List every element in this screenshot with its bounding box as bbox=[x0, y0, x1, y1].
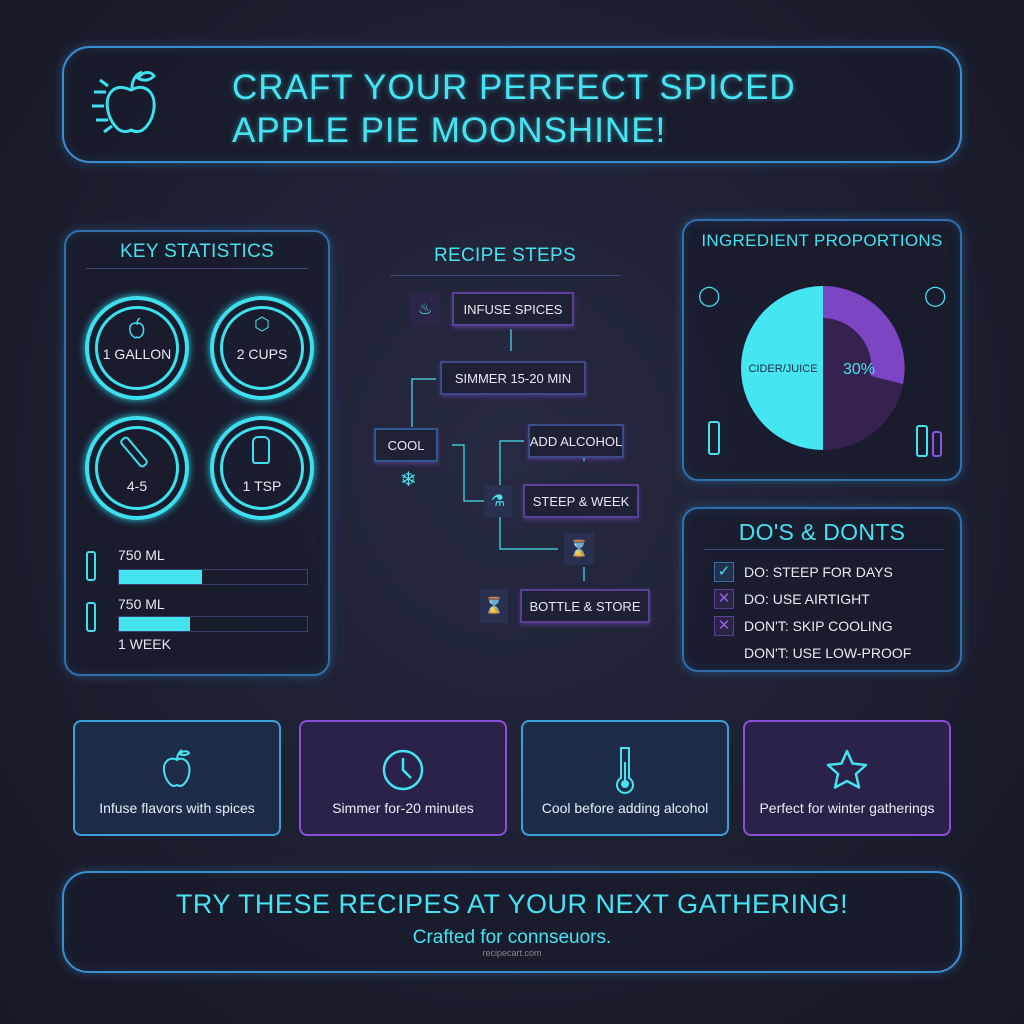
step: simmer bbox=[440, 361, 586, 395]
footer banner: recipecart.com bbox=[482, 948, 542, 958]
step: add alcohol bbox=[528, 424, 624, 458]
panel: do's and donts bbox=[682, 507, 962, 672]
stat: 2 cups: 2 CUPS bbox=[237, 346, 287, 362]
step: infuse spices: INFUSE SPICES bbox=[464, 302, 562, 316]
panel: recipe steps bbox=[372, 245, 652, 628]
card: winter bbox=[743, 720, 951, 836]
card: infuse: Infuse flavors with spices bbox=[99, 800, 255, 816]
icon: hourglass bbox=[564, 533, 594, 565]
bar: 750 ml week: 750 ML bbox=[118, 596, 165, 612]
card: cool: Cool before adding alcohol bbox=[542, 800, 708, 816]
pie chart bbox=[741, 286, 905, 450]
heading: key statistics: KEY STATISTICS bbox=[120, 241, 274, 262]
bar: 750 ml week: 1 WEEK bbox=[118, 636, 171, 652]
stat: 2 cups: ⬡ bbox=[254, 314, 270, 334]
card: cool bbox=[521, 720, 729, 836]
title text: APPLE PIE MOONSHINE! bbox=[232, 111, 666, 150]
stat: 1 tsp: 1 TSP bbox=[243, 478, 281, 494]
list: DO: STEEP FOR DAYS bbox=[744, 564, 893, 580]
heading: DO'S & DONTS bbox=[739, 519, 905, 545]
footer banner: Crafted for connseuors. bbox=[413, 927, 611, 948]
icons: ◯ bbox=[698, 285, 720, 307]
step: add alcohol: ADD ALCOHOL bbox=[530, 434, 622, 448]
card: winter: Perfect for winter gatherings bbox=[759, 800, 935, 816]
title banner bbox=[62, 46, 962, 163]
bar: 750 ml: 750 ML bbox=[118, 547, 165, 563]
footer banner: TRY THESE RECIPES AT YOUR NEXT GATHERING! bbox=[176, 889, 848, 919]
icon: flask bbox=[484, 485, 512, 517]
stat: 1 tsp bbox=[210, 416, 314, 520]
step: bottle bbox=[520, 589, 650, 623]
stat: 1 gallon: 1 GALLON bbox=[103, 346, 171, 362]
connectors bbox=[411, 329, 585, 581]
heading: recipe steps: RECIPE STEPS bbox=[434, 245, 576, 266]
title text bbox=[230, 68, 796, 150]
step: infuse spices bbox=[452, 292, 574, 326]
card: simmer: Simmer for-20 minutes bbox=[332, 800, 474, 816]
step: steep: STEEP & WEEK bbox=[533, 494, 629, 508]
pie chart: CIDER/JUICE bbox=[748, 363, 818, 375]
step: bottle: BOTTLE & STORE bbox=[529, 598, 640, 614]
icon: flame bbox=[410, 292, 440, 326]
list: ✓ bbox=[718, 563, 730, 580]
panel: ingredient proportions: ◯ bbox=[924, 285, 946, 307]
list: DON'T: USE LOW-PROOF bbox=[744, 645, 911, 661]
pie chart: 30% bbox=[843, 361, 875, 378]
heading: INGREDIENT PROPORTIONS bbox=[701, 231, 943, 250]
card: infuse bbox=[73, 720, 281, 836]
title text: CRAFT YOUR PERFECT SPICED bbox=[232, 68, 796, 107]
icon: flask: ⚗ bbox=[491, 493, 505, 510]
step: simmer: SIMMER 15-20 MIN bbox=[455, 370, 571, 386]
icon: apple bbox=[92, 70, 156, 134]
card: simmer bbox=[299, 720, 507, 836]
stat: 4-5 bbox=[85, 416, 189, 520]
stat: 1 gallon bbox=[85, 296, 189, 400]
panel: ingredient proportions bbox=[682, 219, 962, 481]
icon: flame: ♨ bbox=[418, 301, 432, 318]
step: cool: COOL bbox=[388, 438, 424, 452]
step: steep bbox=[523, 484, 639, 518]
bar: 750 ml week bbox=[86, 596, 308, 652]
list: DON'T: SKIP COOLING bbox=[744, 618, 893, 634]
list bbox=[714, 562, 911, 661]
icon: hourglass 2 bbox=[480, 589, 508, 623]
footer banner bbox=[62, 871, 962, 973]
panel: recipe steps: ❄ bbox=[400, 469, 417, 491]
list: ✕ bbox=[718, 590, 730, 607]
list: DO: USE AIRTIGHT bbox=[744, 591, 870, 607]
list: ✕ bbox=[718, 617, 730, 634]
panel: key statistics bbox=[64, 230, 330, 676]
stat: 4-5: 4-5 bbox=[127, 478, 147, 494]
stat: 2 cups bbox=[210, 296, 314, 400]
step: cool bbox=[374, 428, 438, 462]
icon: hourglass 2: ⌛ bbox=[484, 598, 504, 615]
bar: 750 ml bbox=[86, 547, 308, 585]
icon: hourglass: ⌛ bbox=[569, 541, 589, 558]
